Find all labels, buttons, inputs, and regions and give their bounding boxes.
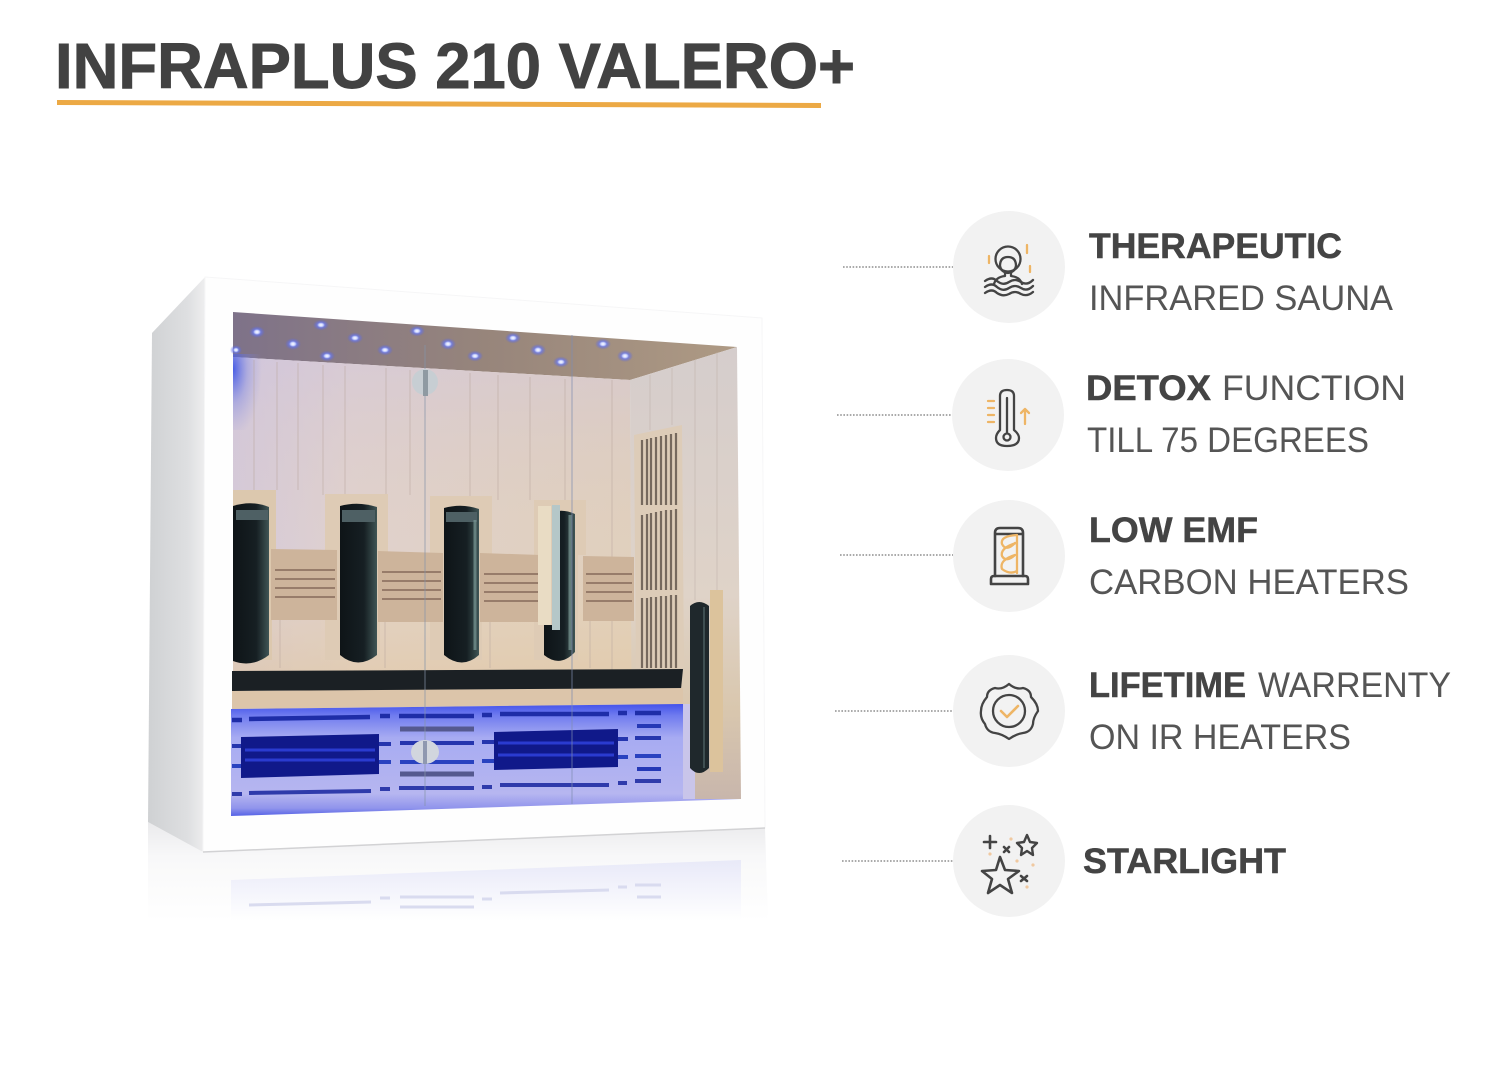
text: detox function: DETOX — [1086, 369, 1212, 408]
icon: person in sauna — [953, 211, 1065, 323]
feature: starlight — [842, 805, 1286, 917]
back wall — [233, 354, 632, 672]
glass hinge top — [412, 369, 438, 396]
cabin white frame — [203, 277, 765, 852]
title underline — [57, 100, 821, 108]
ceiling with starlight — [230, 312, 737, 380]
bench front — [232, 688, 683, 709]
heater panels — [233, 490, 586, 663]
icon: thermometer — [952, 359, 1064, 471]
icon: carbon heater — [953, 500, 1065, 612]
black bench top — [232, 669, 683, 691]
icon: stars — [953, 805, 1065, 917]
feature: detox function — [837, 359, 1406, 471]
cabin side panel — [148, 277, 205, 852]
blue lit lower panel — [231, 704, 741, 816]
floor reflection — [148, 822, 768, 921]
text: carbon heaters: CARBON HEATERS — [1089, 563, 1409, 602]
text: on ir heaters: ON IR HEATERS — [1089, 718, 1351, 757]
text: till 75 degrees: TILL 75 DEGREES — [1087, 421, 1369, 460]
text: infrared sauna: INFRARED SAUNA — [1089, 279, 1394, 318]
title: INFRAPLUS 210 VALERO+ — [55, 30, 855, 102]
backrest slats — [271, 549, 634, 622]
text: lifetime warrenty: LIFETIME — [1089, 666, 1246, 705]
side wall — [630, 347, 741, 799]
text: low emf: LOW EMF — [1089, 511, 1258, 550]
text: lifetime warrenty: WARRENTY — [1258, 666, 1451, 705]
text: detox function: FUNCTION — [1222, 369, 1406, 408]
wall grille — [634, 425, 684, 668]
feature: therapeutic infrared sauna — [843, 211, 1394, 323]
icon: badge with check — [953, 655, 1065, 767]
text: starlight: STARLIGHT — [1083, 842, 1286, 881]
feature: low emf — [840, 500, 1409, 612]
text: therapeutic: THERAPEUTIC — [1089, 227, 1342, 266]
door bar handle — [538, 505, 560, 630]
glass hinge bottom — [411, 740, 439, 764]
feature: lifetime warranty — [835, 655, 1451, 767]
frame bottom shadow line — [203, 828, 765, 852]
glass door lines — [425, 335, 572, 806]
sauna illustration — [148, 277, 768, 921]
lower heater panels — [241, 729, 618, 778]
side heater — [690, 590, 723, 773]
